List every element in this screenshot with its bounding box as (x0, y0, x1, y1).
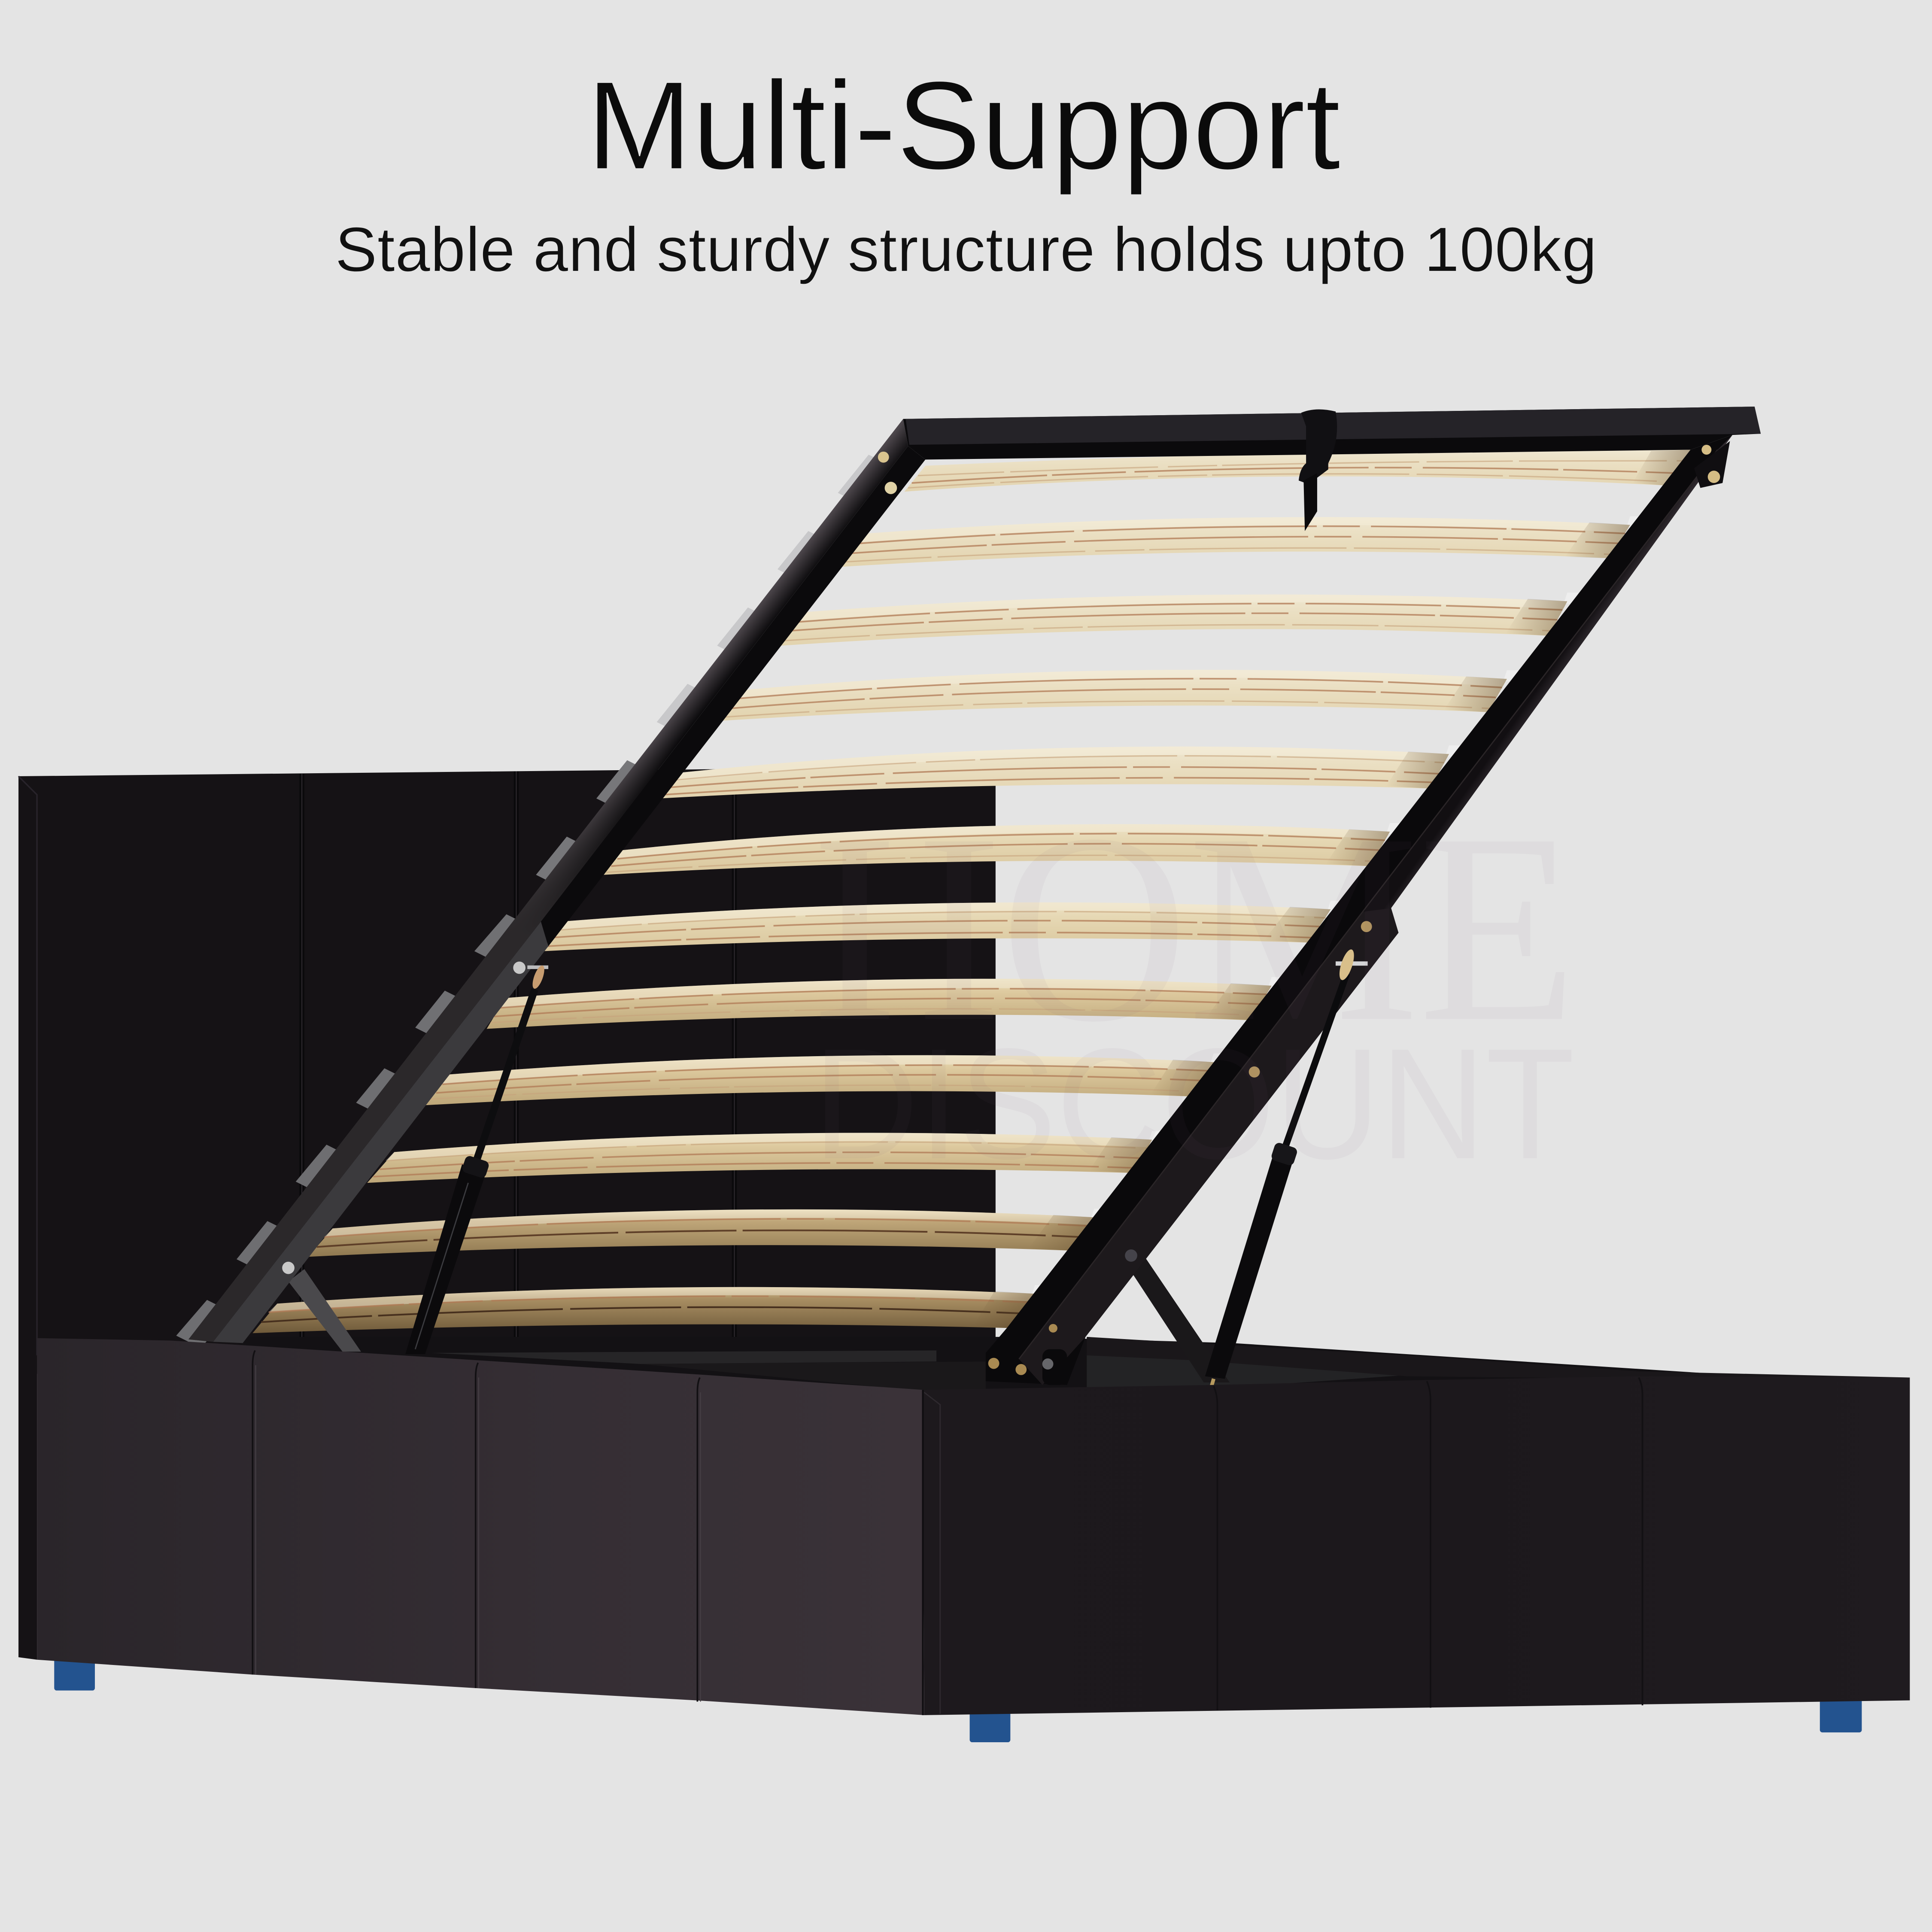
left rail inner black (541, 446, 925, 946)
subtitle: Stable and sturdy structure holds upto 100kg (335, 215, 1597, 285)
strut collar (1270, 1142, 1298, 1166)
bottom hinge (1042, 1349, 1067, 1385)
lifting frame (188, 407, 1761, 1385)
right corner plate (1694, 441, 1730, 488)
back rim (1087, 1337, 1910, 1379)
right rail outer band (1363, 435, 1732, 912)
right rail ridge (1019, 450, 1718, 1359)
bed legs (54, 1657, 1862, 1742)
strut collar (461, 1155, 490, 1179)
slat 10 (367, 1133, 1152, 1183)
slat 6 (604, 824, 1390, 875)
bolts (282, 445, 1720, 1375)
slat 3 (781, 595, 1567, 646)
slats (252, 450, 1691, 1333)
top rail black (903, 407, 1761, 459)
right scissor support (1124, 1247, 1230, 1382)
interior floor left (431, 1350, 936, 1364)
bed storage interior (234, 1337, 1910, 1398)
interior floor right (1087, 1353, 1407, 1388)
slat 12 (252, 1287, 1035, 1333)
left rail outer face (188, 419, 908, 1342)
middle leg (970, 1710, 1010, 1742)
slat 5 (659, 747, 1449, 799)
left leg (54, 1657, 95, 1691)
slat 11 (308, 1209, 1094, 1257)
left strut eyelet (527, 964, 548, 990)
slat 2 (841, 517, 1630, 567)
watermark: DISCOUNT (813, 1015, 1575, 1192)
interior panel (641, 1361, 986, 1395)
right leg (1820, 1698, 1862, 1732)
left rail lower face fade (188, 739, 681, 1342)
slat right-end clips (1031, 516, 1641, 1296)
headboard (18, 766, 996, 1660)
slat 7 (542, 902, 1331, 951)
slat 1 (905, 450, 1691, 492)
storage strap (1299, 409, 1337, 531)
left rail mounting tabs (176, 455, 893, 1348)
watermark: HOME (813, 777, 1577, 1078)
bed base front-right face (923, 1376, 1910, 1715)
right gas strut (1205, 948, 1368, 1388)
slat 4 (721, 670, 1507, 721)
left rail lower plate (213, 922, 548, 1343)
top rail face (905, 407, 1761, 445)
slat 9 (425, 1055, 1214, 1105)
left scissor support (289, 1269, 361, 1352)
title: Multi-Support (586, 55, 1341, 196)
bed base front-left face (37, 1338, 924, 1715)
right rail lower plate (1019, 908, 1398, 1385)
right rail black (986, 435, 1732, 1385)
slat 8 (487, 979, 1272, 1029)
left gas strut (405, 990, 535, 1354)
